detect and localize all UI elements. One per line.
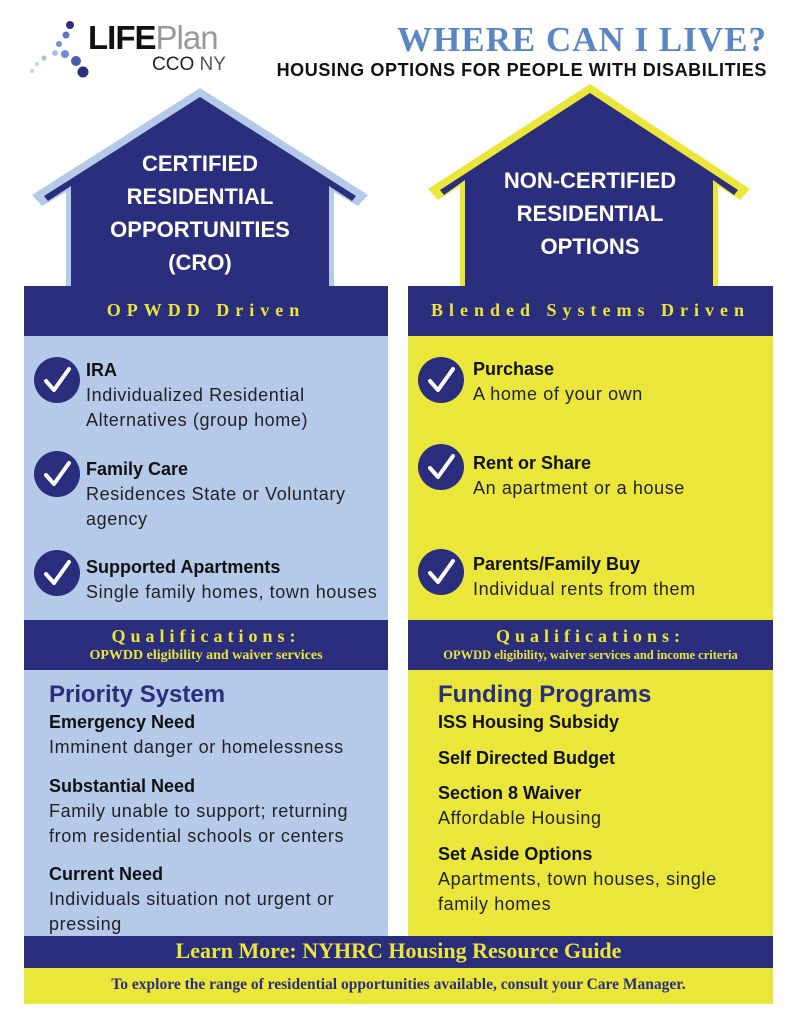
left options list: IRA bbox=[86, 360, 117, 380]
learn more bar: Learn More: NYHRC Housing Resource Guide bbox=[176, 938, 621, 963]
funding programs bbox=[438, 681, 717, 914]
left options list: Supported Apartments bbox=[86, 557, 280, 577]
left options list: Single family homes, town houses bbox=[86, 582, 377, 602]
house: right roof bbox=[428, 84, 750, 290]
left options list: Individualized Residential bbox=[86, 385, 305, 405]
bar: OPWDD driven: OPWDD Driven bbox=[107, 300, 305, 320]
bar: blended: Blended Systems Driven bbox=[431, 300, 750, 320]
heading: non-certified: NON-CERTIFIED bbox=[504, 168, 676, 193]
qualifications left: Qualifications: bbox=[111, 626, 300, 646]
priority system: Family unable to support; returning bbox=[49, 801, 348, 821]
heading: CRO: CERTIFIED bbox=[142, 151, 258, 176]
priority system: Imminent danger or homelessness bbox=[49, 737, 344, 757]
right options list: A home of your own bbox=[473, 384, 643, 404]
priority system: from residential schools or centers bbox=[49, 826, 344, 846]
panels bbox=[24, 286, 388, 936]
priority system bbox=[49, 681, 348, 934]
heading: CRO: RESIDENTIAL bbox=[127, 184, 273, 209]
right options list: Purchase bbox=[473, 359, 554, 379]
house: left roof bbox=[32, 88, 368, 290]
right options list: Rent or Share bbox=[473, 453, 591, 473]
footer note: To explore the range of residential opportunities available, consult your Care Manager. bbox=[111, 976, 686, 993]
funding programs: Self Directed Budget bbox=[438, 748, 615, 768]
right options list bbox=[473, 359, 696, 599]
funding programs: Set Aside Options bbox=[438, 844, 592, 864]
logo: CCO NY bbox=[152, 54, 226, 75]
checks bbox=[34, 357, 464, 596]
qualifications right: Qualifications: bbox=[496, 626, 685, 646]
funding programs: Apartments, town houses, single bbox=[438, 869, 717, 889]
left options list: Family Care bbox=[86, 459, 188, 479]
heading: CRO: OPPORTUNITIES bbox=[110, 217, 290, 242]
logo bbox=[88, 19, 226, 75]
title bbox=[277, 20, 767, 80]
heading: CRO bbox=[110, 151, 290, 275]
funding programs: Affordable Housing bbox=[438, 808, 602, 828]
left options list: Alternatives (group home) bbox=[86, 410, 308, 430]
priority system: Individuals situation not urgent or bbox=[49, 889, 334, 909]
title: HOUSING OPTIONS FOR PEOPLE WITH DISABILITIES bbox=[277, 60, 767, 80]
right options list: Individual rents from them bbox=[473, 579, 696, 599]
priority system: Current Need bbox=[49, 864, 163, 884]
funding programs: family homes bbox=[438, 894, 551, 914]
heading: non-certified: RESIDENTIAL bbox=[517, 201, 663, 226]
funding programs: Section 8 Waiver bbox=[438, 783, 581, 803]
qualifications right: OPWDD eligibility, waiver services and income criteria bbox=[443, 648, 738, 662]
priority system: Priority System bbox=[49, 681, 225, 708]
left options list bbox=[86, 360, 377, 602]
right options list: An apartment or a house bbox=[473, 478, 685, 498]
title: WHERE CAN I LIVE? bbox=[397, 20, 767, 59]
logo dots bbox=[30, 21, 88, 78]
qualifications right bbox=[443, 626, 738, 662]
heading: non-certified: OPTIONS bbox=[540, 234, 640, 259]
priority system: pressing bbox=[49, 914, 122, 934]
logo: LIFEPlan bbox=[88, 19, 218, 56]
priority system: Substantial Need bbox=[49, 776, 195, 796]
qualifications left bbox=[89, 626, 323, 663]
left options list: Residences State or Voluntary bbox=[86, 484, 346, 504]
funding programs: Funding Programs bbox=[438, 681, 651, 708]
priority system: Emergency Need bbox=[49, 712, 195, 732]
qualifications left: OPWDD eligibility and waiver services bbox=[89, 648, 323, 663]
heading: CRO: (CRO) bbox=[168, 250, 232, 275]
heading: non-certified bbox=[504, 168, 676, 259]
right options list: Parents/Family Buy bbox=[473, 554, 640, 574]
funding programs: ISS Housing Subsidy bbox=[438, 712, 619, 732]
left options list: agency bbox=[86, 509, 148, 529]
